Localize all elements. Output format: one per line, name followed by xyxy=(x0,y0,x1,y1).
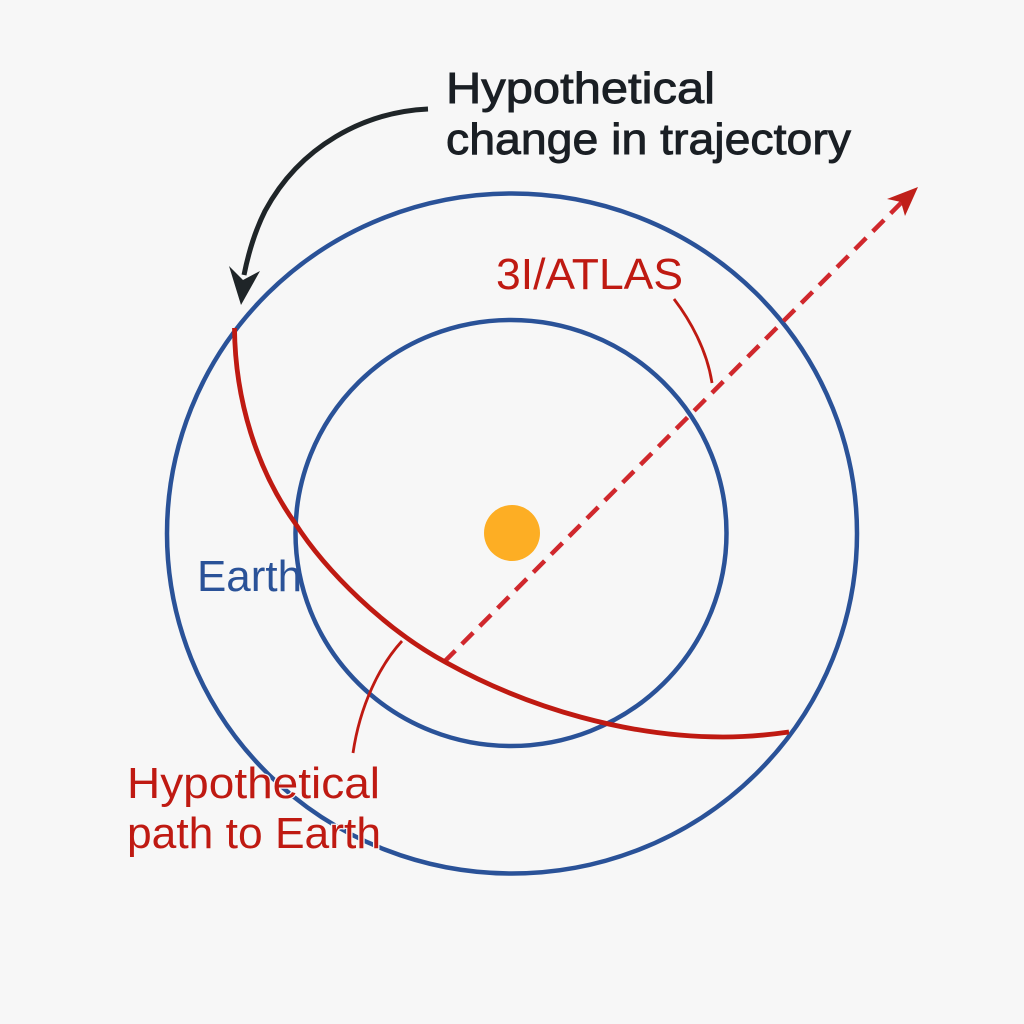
heading: hypothetical change in trajectory: Hypothetical xyxy=(446,64,715,113)
label: hypothetical path to Earth: path to Earth xyxy=(127,809,381,858)
outer orbit: Earth xyxy=(167,194,857,874)
arrowhead: black arrow xyxy=(229,266,260,305)
heading: hypothetical change in trajectory: change in trajectory xyxy=(446,115,851,164)
dashed trajectory of 3I/ATLAS xyxy=(444,202,902,662)
leader line: hypothetical path xyxy=(353,641,402,753)
label: Earth: Earth xyxy=(197,552,302,601)
label: hypothetical path to Earth: Hypothetical xyxy=(127,759,380,808)
label: 3I/ATLAS: 3I/ATLAS xyxy=(496,250,683,299)
arrowhead: trajectory xyxy=(887,187,918,216)
leader line: 3I/ATLAS xyxy=(674,299,712,383)
curved black arrow xyxy=(244,109,428,275)
hypothetical path curve xyxy=(234,328,789,737)
inner orbit xyxy=(296,320,726,746)
icon: sun xyxy=(484,505,540,561)
